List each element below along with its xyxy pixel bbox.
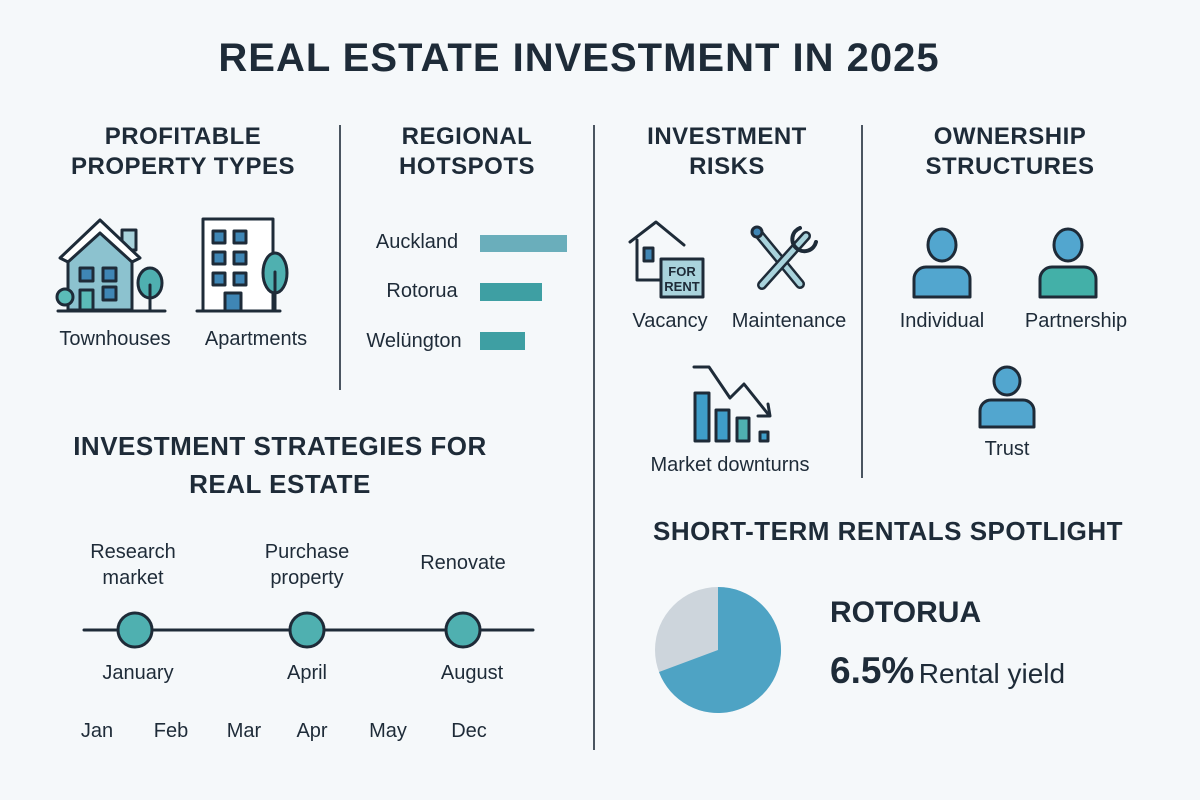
heading: ownership — [925, 123, 1095, 180]
heading: ownership: STRUCTURES — [925, 153, 1095, 180]
heading: regional hotspots: REGIONAL — [402, 123, 532, 150]
label: townhouses: Townhouses — [59, 328, 171, 350]
heading: risks — [647, 123, 807, 180]
label: market downturns: Market downturns — [651, 454, 809, 476]
heading: spotlight: SHORT-TERM RENTALS SPOTLIGHT — [653, 516, 1123, 546]
icon: partnership — [1040, 229, 1096, 297]
icon: trust — [980, 367, 1034, 427]
timeline — [84, 613, 533, 647]
heading: property types: PROPERTY TYPES — [71, 153, 295, 180]
panel: investment strategies: Mar — [227, 720, 261, 742]
icon: apartments — [197, 219, 287, 311]
panel: regional hotspots — [366, 123, 535, 352]
panel: investment risks — [632, 123, 846, 476]
panel: investment strategies: Apr — [296, 720, 328, 742]
panel: investment strategies: May — [369, 720, 407, 742]
text: Rotorua: ROTORUA — [830, 596, 981, 629]
panel: investment strategies: Dec — [451, 720, 487, 742]
bar chart: hotspots — [480, 235, 567, 350]
heading: strategies: INVESTMENT STRATEGIES FOR — [73, 431, 487, 461]
icon: vacancy: RENT — [664, 279, 700, 294]
label: Wellington: Welüngton — [366, 330, 462, 352]
icon: maintenance — [752, 227, 816, 285]
label: trust: Trust — [985, 438, 1029, 460]
heading: strategies — [73, 431, 487, 499]
step labels: Research — [90, 541, 176, 563]
panel: investment strategies: property — [270, 567, 344, 589]
panel: investment strategies: Jan — [81, 720, 113, 742]
title: REAL ESTATE INVESTMENT IN 2025 — [218, 36, 940, 80]
heading: property types: PROFITABLE — [105, 123, 261, 150]
heading: risks: INVESTMENT — [647, 123, 807, 150]
label: apartments: Apartments — [205, 328, 307, 350]
panel: investment strategies: August — [441, 662, 503, 684]
panel: investment strategies — [73, 431, 506, 742]
heading: risks: RISKS — [689, 153, 765, 180]
panel: profitable property types — [59, 123, 307, 350]
panel: ownership structures — [900, 123, 1127, 460]
heading: strategies: REAL ESTATE — [189, 469, 371, 499]
label: partnership: Partnership — [1025, 310, 1127, 332]
step labels: market — [102, 567, 164, 589]
label: individual: Individual — [900, 310, 984, 332]
heading: regional hotspots: HOTSPOTS — [399, 153, 535, 180]
panel: investment strategies: Purchase — [265, 541, 349, 563]
heading: property types — [71, 123, 295, 180]
heading: regional hotspots — [399, 123, 535, 180]
panel: investment strategies: January — [102, 662, 174, 684]
icon: townhouse — [57, 220, 165, 311]
panel: short-term rentals — [653, 516, 1123, 691]
step labels — [90, 541, 176, 589]
label: vacancy: Vacancy — [632, 310, 708, 332]
heading: ownership: OWNERSHIP — [934, 123, 1086, 150]
icon: individual — [914, 229, 970, 297]
icon: vacancy — [630, 222, 703, 297]
label: maintenance: Maintenance — [732, 310, 846, 332]
text: yield: 6.5% Rental yield — [830, 650, 1065, 691]
panel: investment strategies: Renovate — [420, 552, 506, 574]
panel: investment strategies: Feb — [154, 720, 188, 742]
label: Auckland: Auckland — [376, 231, 458, 253]
icon: market downturn — [694, 367, 770, 441]
pie chart — [655, 587, 781, 713]
label: Rotorua: Rotorua — [386, 280, 458, 302]
icon: vacancy: FOR — [668, 264, 696, 279]
panel: investment strategies: April — [287, 662, 327, 684]
